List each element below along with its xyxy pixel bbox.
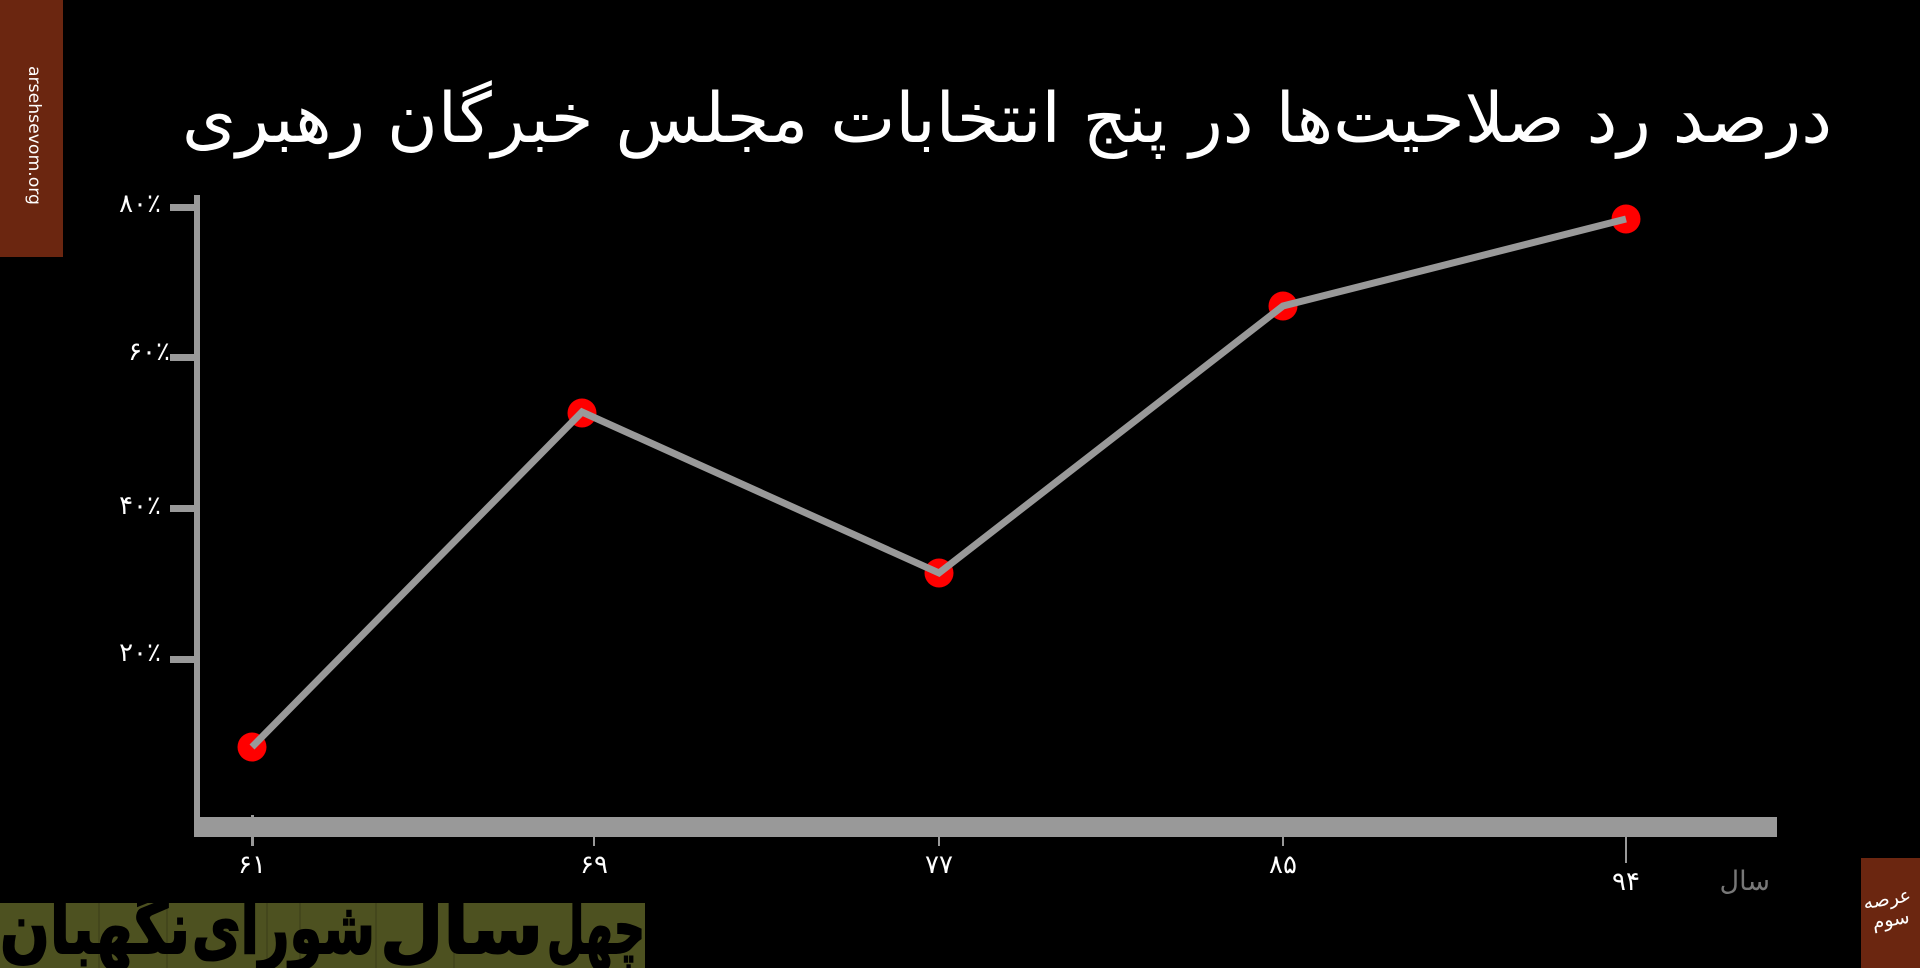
logo wordmark — [1861, 884, 1916, 935]
y axis labels: ۴۰٪ — [119, 491, 161, 521]
x axis title: سال — [1720, 866, 1770, 897]
banner text: چهل — [547, 886, 645, 968]
x axis labels: ۸۵ — [1269, 850, 1297, 880]
x axis labels: ۶۱ — [238, 850, 266, 880]
logo box — [1861, 858, 1920, 968]
y axis labels: ۲۰٪ — [119, 638, 161, 668]
banner text: سال — [380, 886, 543, 968]
series banner — [0, 886, 645, 968]
x axis labels: ۹۴ — [1612, 867, 1640, 897]
banner text: نگهبان — [0, 886, 190, 968]
x axis labels: ۷۷ — [925, 850, 953, 880]
x axis labels — [238, 850, 1640, 897]
logo wordmark: عرصه — [1861, 884, 1913, 914]
x axis labels: ۶۹ — [580, 850, 608, 880]
website address: arsehsevom.org — [24, 66, 44, 205]
data points — [238, 204, 1640, 762]
y axis labels: ۶۰٪ — [128, 337, 170, 367]
line chart — [119, 189, 1777, 897]
banner text — [0, 886, 645, 968]
y axis labels: ۸۰٪ — [119, 189, 161, 219]
side tab: website — [0, 0, 63, 257]
x axis — [194, 815, 1777, 863]
title: درصد رد صلاحیت‌ها در پنج انتخابات مجلس خبرگان رهبری — [182, 79, 1832, 159]
y axis — [170, 195, 200, 837]
logo wordmark: سوم — [1870, 906, 1911, 934]
data line — [252, 219, 1626, 747]
banner text: شورای — [192, 886, 375, 968]
y axis labels — [119, 189, 170, 668]
